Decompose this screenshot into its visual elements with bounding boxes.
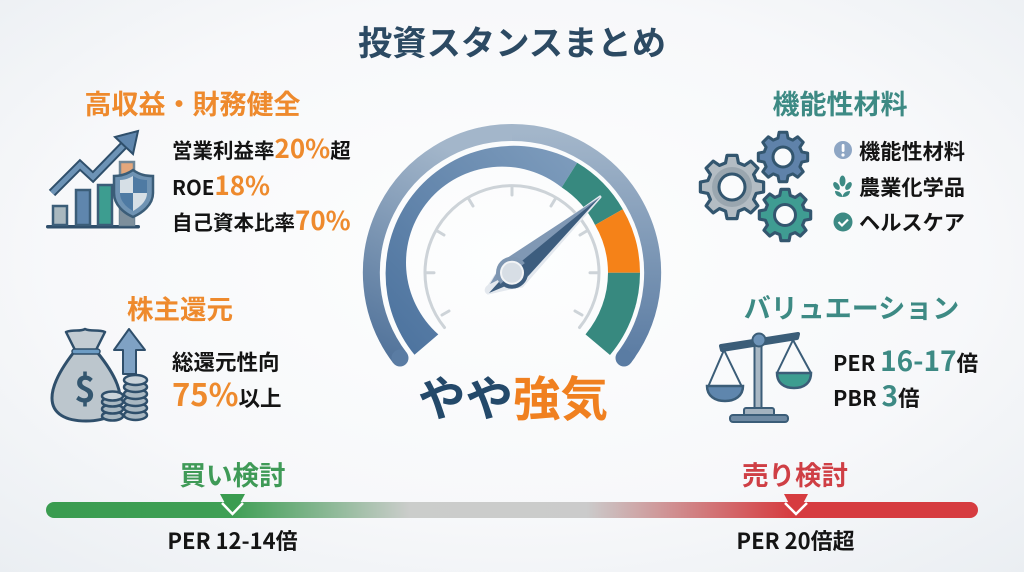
list item: healthcare: ヘルスケア [859,206,965,237]
gauge tick ring [425,186,599,328]
text: ROE: ROE18% [172,166,270,203]
text: operating margin: 営業利益率20%超 [172,129,351,166]
list item: functional materials: 機能性材料 [859,135,965,166]
text: PER: PER 16-17倍 [833,340,978,380]
heading: profitability: 高収益・財務健全 [84,83,300,122]
icon: gears [700,132,811,241]
text: 75 percent or more: 75%以上 [172,370,281,415]
text: equity ratio: 自己資本比率70% [172,201,351,238]
gradient track [46,502,978,518]
label: sell consideration: 売り検討 [742,454,848,493]
gauge outer arc [371,132,653,366]
text: total return ratio: 総還元性向 [172,346,280,377]
panel: valuation [707,287,978,422]
marker: buy [220,494,245,517]
icon: money bag with coins: $ [74,361,96,413]
marker: sell [784,494,808,517]
panel: price range scale [46,454,978,556]
icon: balance scale [707,334,811,422]
text: PER over 20: PER 20倍超 [736,524,855,556]
icon: money bag with coins [52,329,147,421]
panel: shareholder returns [52,288,281,421]
text: PBR: PBR 3倍 [833,375,920,415]
label: buy consideration: 買い検討 [180,454,286,493]
list item: agrochemicals: 農業化学品 [859,171,965,202]
panel: gauge [371,132,653,430]
heading: functional materials: 機能性材料 [772,83,908,122]
text: PER 12-14: PER 12-14倍 [167,524,298,556]
gauge needle [486,197,600,293]
title: 投資スタンスまとめ [358,15,666,65]
gauge label: やや強気 [418,361,608,430]
gauge coloured band [386,146,640,355]
panel: profitability and financial health [46,83,351,238]
icon: growth chart with shield [46,131,153,228]
panel: functional materials [700,83,965,241]
heading: valuation: バリュエーション [744,287,959,326]
heading: shareholder returns: 株主還元 [127,288,233,327]
